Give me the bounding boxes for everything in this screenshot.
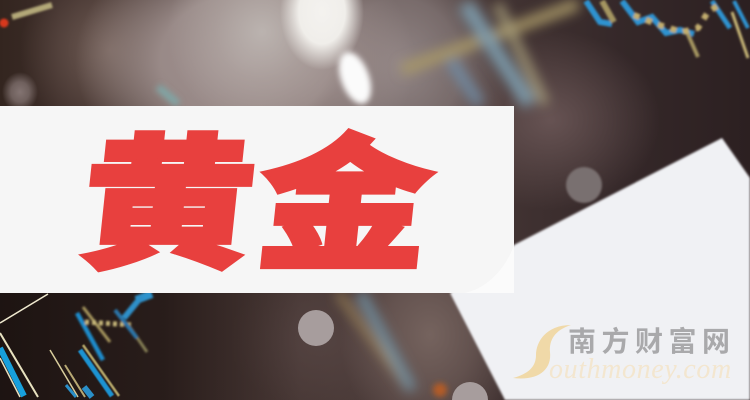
logo English name: outhmoney.com	[549, 354, 732, 385]
lower-left dark shade	[0, 293, 300, 400]
lower-left candlestick chart	[0, 294, 152, 397]
upper-right candlestick chart	[586, 1, 748, 58]
sheet corner seen through banner	[465, 245, 514, 293]
logo Chinese name: 南方财富网	[568, 320, 736, 360]
white highlight reflection	[333, 48, 377, 108]
top-left beads	[0, 5, 178, 104]
bokeh circles	[298, 167, 602, 400]
title text: 黄金	[72, 89, 447, 298]
logo swoosh S	[513, 325, 571, 378]
blurred gold and blue chart lines	[338, 4, 578, 390]
white paper sheet lower right	[450, 138, 750, 400]
logo: southmoney watermark	[513, 320, 736, 385]
title banner	[0, 89, 514, 298]
